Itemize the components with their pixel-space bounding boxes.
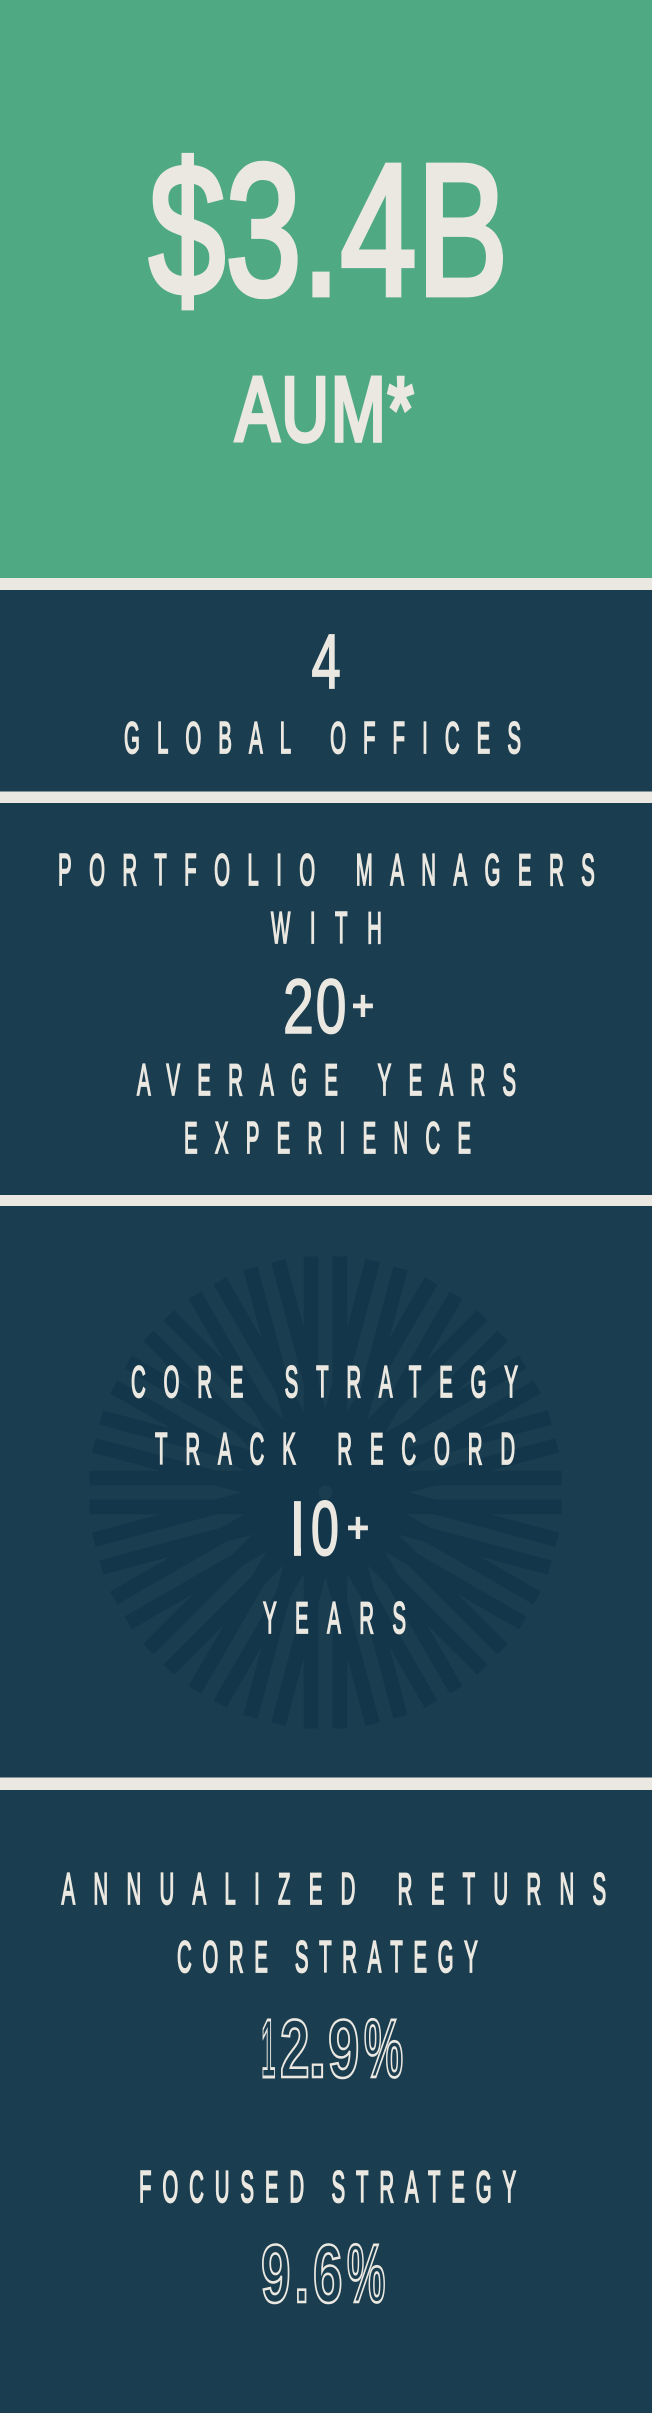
sunburst background <box>90 1256 562 1728</box>
label: with: WITH <box>271 904 382 953</box>
number: 10+: + <box>346 1503 370 1552</box>
value: 12.9%: 9 <box>328 2003 359 2096</box>
label: focused strategy: FOCUSED STRATEGY <box>139 2163 516 2212</box>
label: average years: AVERAGE YEARS <box>137 1056 516 1105</box>
value: 12.9%: 1 <box>261 2002 275 2095</box>
value: 9.6%: % <box>347 2228 385 2321</box>
number: 20+ <box>283 964 375 1050</box>
panel: portfolio managers <box>0 803 652 1195</box>
value: 12.9%: . <box>308 2002 327 2095</box>
value: 9.6% <box>261 2227 385 2321</box>
value: 12.9%: 2 <box>280 2002 310 2095</box>
label: global offices: GLOBAL OFFICES <box>124 714 521 763</box>
label: years: YEARS <box>263 1594 406 1643</box>
number: 4: 4 <box>312 618 341 704</box>
number: 10+ <box>294 1500 368 1556</box>
label: experience: EXPERIENCE <box>184 1114 471 1163</box>
value: 12.9%: % <box>364 2003 403 2096</box>
number: 20+: + <box>351 981 375 1030</box>
number: 10+: 1 <box>276 1486 315 1572</box>
label: core strategy: CORE STRATEGY <box>177 1933 478 1982</box>
number: 10+: 0 <box>311 1485 339 1572</box>
label: core strategy: CORE STRATEGY <box>131 1358 518 1407</box>
label: track record: TRACK RECORD <box>155 1425 515 1474</box>
number: 20+: 20 <box>283 964 346 1050</box>
panel: assets under management <box>0 0 652 578</box>
value: 12.9% <box>261 2002 403 2096</box>
label: AUM*: AUM* <box>236 358 413 460</box>
value: 9.6%: 6 <box>313 2227 343 2320</box>
value: 9.6%: . <box>294 2227 309 2320</box>
big number: $3.4B: $3.4B <box>149 124 508 334</box>
label: annualized returns: ANNUALIZED RETURNS <box>62 1865 606 1914</box>
panel: global offices <box>0 590 652 791</box>
panel: annualized returns <box>0 1790 652 2413</box>
value: 9.6%: 9 <box>261 2227 291 2320</box>
label: portfolio managers: PORTFOLIO MANAGERS <box>58 846 595 895</box>
panel: core strategy track record <box>132 1339 518 1646</box>
